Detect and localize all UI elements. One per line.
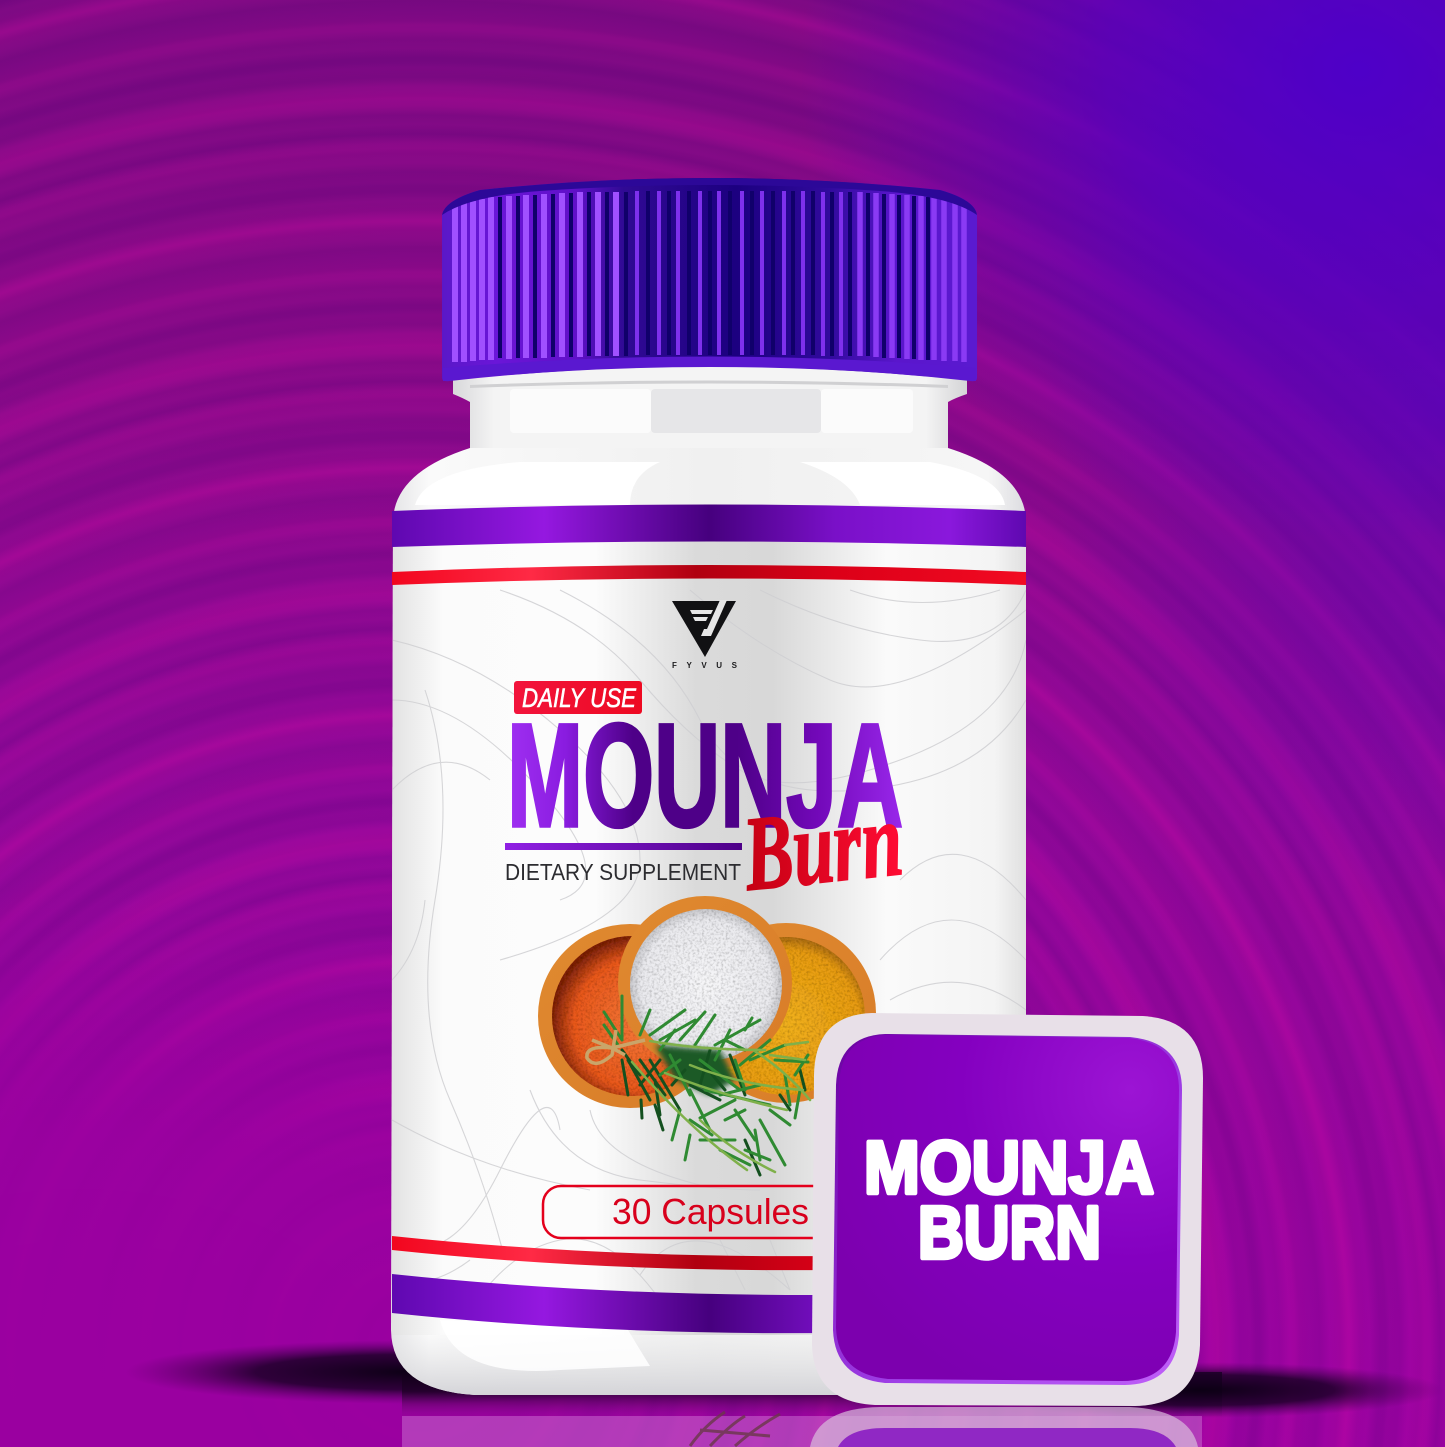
label contour lines [392,590,1026,1310]
neck highlight left [510,389,651,433]
twine knot [587,1030,645,1063]
brand logo [672,600,738,670]
badge rim [812,1013,1203,1406]
base highlight [440,1320,650,1371]
badge: mounja burn [812,1013,1203,1406]
salt bowl [618,896,792,1070]
cap [442,178,977,381]
base shading [392,1344,837,1395]
badge face edge [833,1034,1182,1385]
top red stripe [392,565,1026,585]
neck highlight right [821,389,913,433]
capsule count: 30 Capsules [612,1191,809,1232]
cap ribs: light [455,192,616,362]
shoulder highlights [415,462,1005,505]
badge text: mounja: MOUNJA [864,1126,1154,1209]
product illustration [141,178,1431,1447]
neck shade [651,389,821,433]
bottle body [391,448,1026,1395]
neck lip shadow [470,380,948,388]
cap ribs: right light [860,192,964,362]
script: burn: Burn [737,780,908,913]
label panel [392,542,835,1335]
herb sprig [604,996,810,1175]
bottom purple band [392,1274,830,1333]
cap ribs: dark [500,191,928,360]
cap top rim [442,178,977,215]
tag: daily use: DAILY USE [522,683,637,713]
bottle reflection [402,1407,1202,1447]
badge face [836,1035,1179,1381]
cap ribs: thin light [637,191,841,356]
cap bottom rim [443,356,976,381]
capsule count [543,1186,843,1238]
brand logo: FYVUS [672,661,738,670]
top purple band [392,504,1026,547]
product name: MOUNJA [507,694,903,858]
yellow bowl [696,923,876,1103]
bottom red stripe [392,1236,830,1270]
floor shadow [125,1340,1444,1418]
cap shell [442,178,977,381]
ingredient bowls [538,896,876,1175]
subtitle: DIETARY SUPPLEMENT [505,859,741,885]
underline [505,843,742,850]
badge text: burn: BURN [918,1191,1101,1274]
bottle [391,345,1026,1395]
orange bowl [538,924,722,1108]
bottle lip and neck [453,345,967,450]
